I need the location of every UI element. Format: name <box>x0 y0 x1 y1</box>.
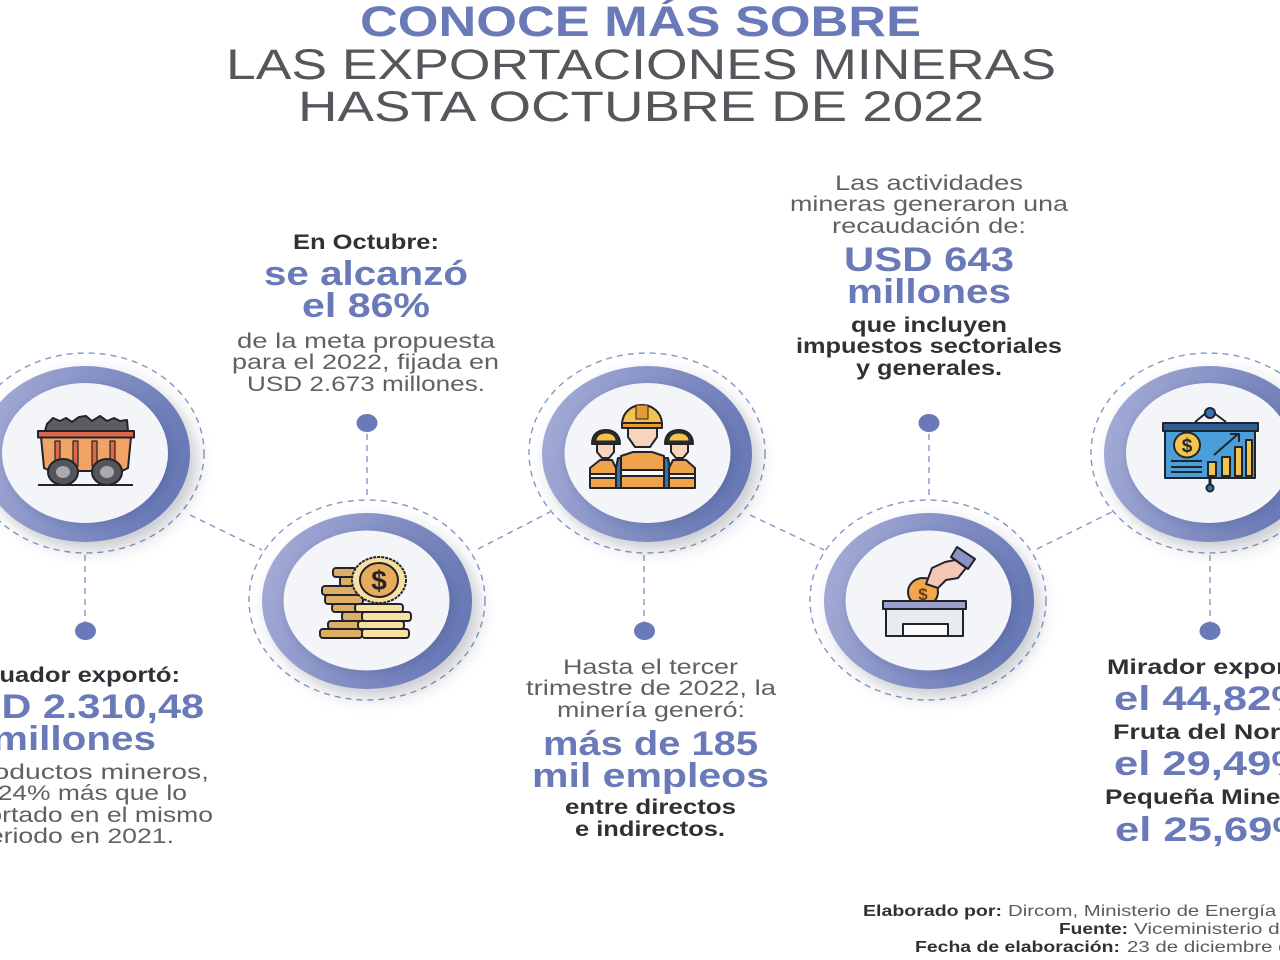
circle: deposit box <box>810 500 1046 700</box>
intro: Las actividades <box>835 172 1023 195</box>
description: USD 2.673 millones. <box>247 373 485 396</box>
share: Fruta del Norte: el 29,49% <box>1114 745 1280 783</box>
value <box>844 241 1014 311</box>
footer credits <box>863 903 1280 956</box>
share: Mirador: Mirador exportó: <box>1107 656 1280 679</box>
icon: coin dollar sign: $ <box>918 585 928 604</box>
share: Fruta del Norte: Fruta del Norte: <box>1113 721 1280 744</box>
description: y generales. <box>856 357 1002 380</box>
footer credits: Dircom, Ministerio de Energía y Minas <box>1008 903 1280 920</box>
icon: dollar sign on coin: $ <box>1182 436 1193 457</box>
value: más de 185 <box>543 725 758 763</box>
value <box>532 725 769 795</box>
description: e indirectos. <box>575 818 725 841</box>
intro: mineras generaron una <box>790 193 1068 216</box>
circle: mining cart <box>0 353 204 553</box>
circle: coins <box>249 500 485 700</box>
icon: presentation board with chart <box>1163 408 1258 492</box>
description <box>796 314 1062 380</box>
description: que incluyen <box>851 314 1007 337</box>
text block: employment <box>526 656 776 841</box>
description: impuestos sectoriales <box>796 335 1062 358</box>
share: Mirador: el 44,82% <box>1114 680 1280 718</box>
title: LAS EXPORTACIONES MINERAS <box>226 41 1056 89</box>
share: Fruta del Norte <box>1113 721 1280 783</box>
circle: presentation board <box>1091 353 1280 553</box>
description: entre directos <box>565 796 736 819</box>
description: de la meta propuesta <box>237 330 495 353</box>
intro: En Octubre: <box>293 231 439 254</box>
marker dots <box>75 414 1220 640</box>
icon: coin stacks <box>320 557 411 638</box>
description: para el 2022, fijada en <box>232 351 499 374</box>
intro: minería generó: <box>557 699 745 722</box>
title <box>226 0 1056 131</box>
description <box>232 330 499 396</box>
text block: 86 percent goal <box>232 231 499 396</box>
intro <box>790 172 1068 238</box>
intro: Hasta el tercer <box>563 656 738 679</box>
text block: tax collection <box>790 172 1068 380</box>
title: HASTA OCTUBRE DE 2022 <box>298 83 984 131</box>
share: Mirador <box>1107 656 1280 718</box>
share: Pequeña Minería: el 25,69% <box>1115 811 1280 849</box>
value <box>0 688 204 758</box>
description <box>565 796 736 841</box>
value: mil empleos <box>532 757 769 795</box>
icon: hand inserting coin in box <box>883 547 975 636</box>
share: Pequeña Minería <box>1105 786 1280 849</box>
circle: workers <box>529 353 765 553</box>
footer credits: Fuente: <box>1059 921 1128 938</box>
description <box>0 761 213 848</box>
footer credits: Elaborado por: <box>863 903 1002 920</box>
value: USD 643 <box>844 241 1014 279</box>
connector lines <box>85 434 1210 622</box>
text block: Ecuador exports <box>0 664 213 848</box>
intro: recaudación de: <box>832 215 1026 238</box>
value: el 86% <box>302 287 430 325</box>
intro: trimestre de 2022, la <box>526 677 776 700</box>
value <box>264 255 468 325</box>
icon: miners <box>590 405 695 488</box>
value: millones <box>847 273 1011 311</box>
intro <box>526 656 776 722</box>
icon: dollar sign: $ <box>371 565 387 596</box>
footer credits: Fecha de elaboración: <box>915 939 1120 956</box>
value: se alcanzó <box>264 255 468 293</box>
icon: mining cart <box>38 416 134 486</box>
text block: company shares <box>1105 656 1280 849</box>
share: Pequeña Minería: Pequeña Minería: <box>1105 786 1280 809</box>
